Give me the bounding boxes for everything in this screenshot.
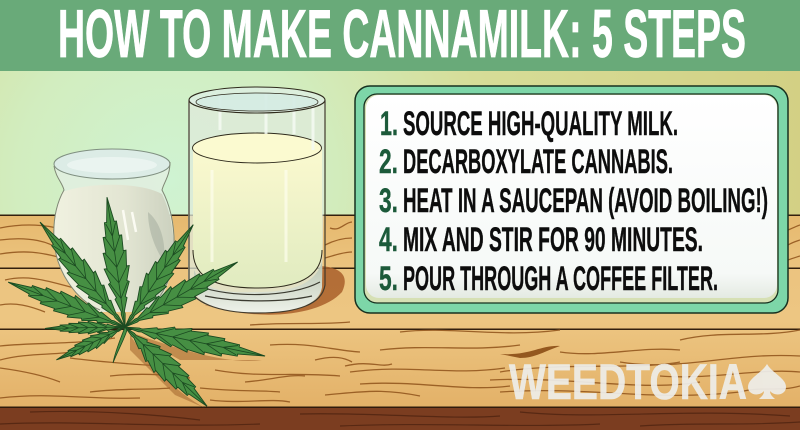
dark table front edge [0,406,800,430]
icon: cannabis leaf [4,196,267,415]
glass shadow [205,266,345,315]
step 3: 3. [379,182,398,220]
icon: jar of milk [54,149,174,312]
icon: spade [748,364,786,399]
background wall [0,70,800,216]
step 5: 5. [379,260,398,298]
panel: steps list [355,86,788,313]
icon: glass of milk [188,87,326,313]
step 2: 2. [379,143,398,181]
title banner [0,0,800,72]
step 1 [380,105,678,143]
step 2 [379,143,673,181]
step 1: 1. [380,105,398,143]
wooden table [0,214,800,407]
step 4: 4. [379,221,398,259]
